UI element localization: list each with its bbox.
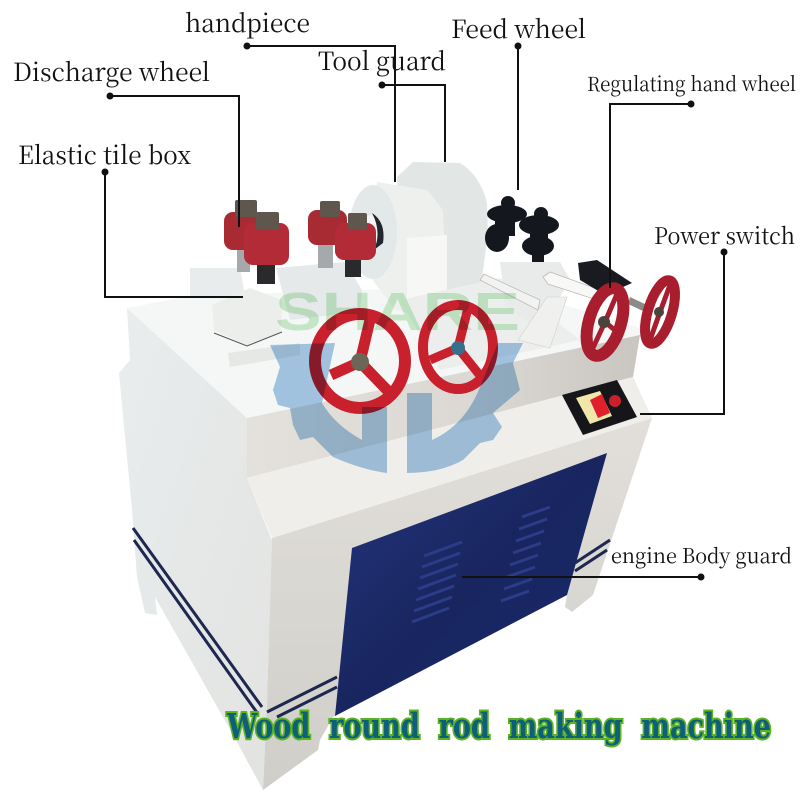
leader dots [102, 42, 728, 580]
discharge wheels [224, 200, 376, 284]
feed wheels [485, 196, 559, 268]
label: handpiece: handpiece [185, 4, 310, 40]
machine body [119, 162, 681, 790]
label: Tool guard: Tool guard [318, 42, 446, 78]
label: Feed wheel: Feed wheel [451, 10, 586, 46]
elastic tile box [212, 288, 300, 367]
large red hand wheel, right [423, 305, 493, 389]
tool guard housing [349, 162, 488, 330]
label: engine Body guard: engine Body guard [611, 539, 792, 569]
watermark: SHARE: SHARE [275, 282, 520, 342]
leader lines [105, 46, 724, 577]
body: lower front panel [263, 418, 652, 790]
small red hand wheel, front [579, 284, 631, 360]
label: Power switch: Power switch [654, 218, 795, 251]
back boxes on top plate [190, 262, 580, 370]
watermark: gear logo [270, 343, 523, 473]
body: left side panel [119, 308, 272, 790]
body: shelf [247, 377, 652, 538]
small red hand wheel, back [639, 277, 681, 347]
body: upper front panel [247, 335, 640, 478]
body: top plate [127, 285, 640, 418]
label: Discharge wheel: Discharge wheel [13, 53, 210, 89]
door vents [412, 507, 550, 622]
feed mechanism [480, 260, 647, 348]
label: Elastic tile box: Elastic tile box [18, 136, 191, 172]
power switch panel [562, 380, 637, 435]
blue access door [335, 453, 607, 716]
large red hand wheel, left [315, 314, 405, 408]
stripes [133, 528, 610, 717]
